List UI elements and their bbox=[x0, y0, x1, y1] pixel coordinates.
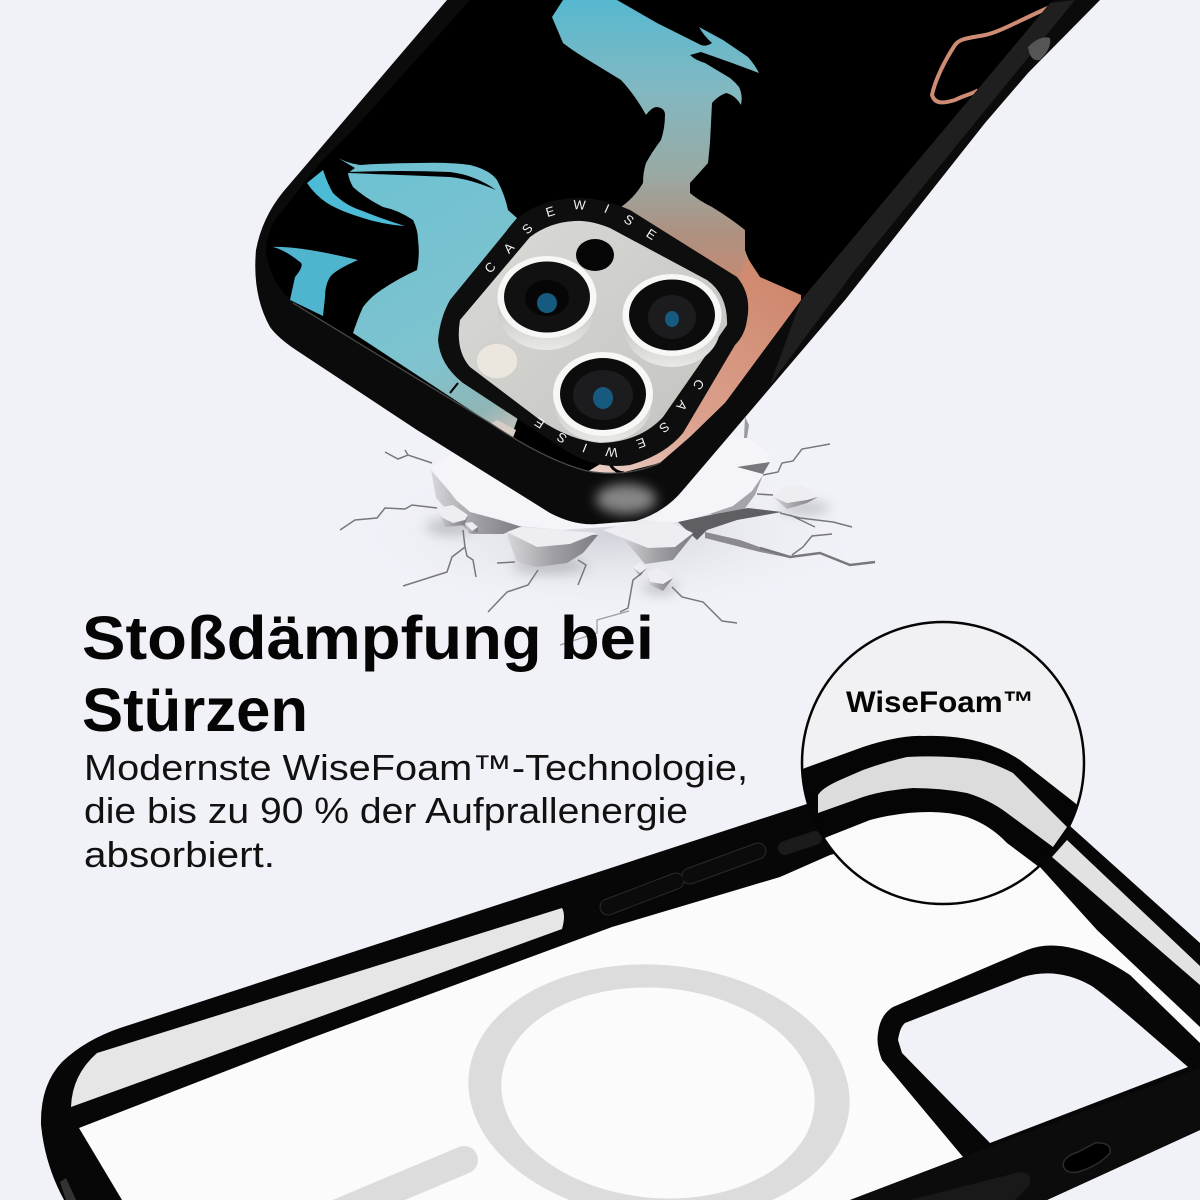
case black frame bbox=[41, 764, 1200, 1200]
cyan lower stripe bbox=[273, 247, 358, 316]
crack lines bbox=[340, 444, 875, 645]
heading: Stoßdämpfung bei bbox=[82, 604, 654, 672]
camera cutout window bbox=[898, 973, 1188, 1143]
camera island bbox=[438, 198, 748, 466]
magnet alignment bar bbox=[340, 1160, 464, 1200]
phone bumper bbox=[255, 0, 1100, 524]
body text: Modernste WiseFoam™-Technologie, bbox=[84, 747, 748, 788]
pale tip near rim bbox=[492, 420, 516, 437]
chunk sides bbox=[437, 497, 818, 591]
soft chunk shadows bbox=[426, 502, 830, 594]
flash bbox=[476, 343, 518, 379]
body text bbox=[84, 747, 748, 875]
WiseFoam magnifier callout bbox=[800, 620, 1086, 906]
rose-gold band by lens island bbox=[587, 257, 801, 474]
case back artwork bbox=[266, 0, 1054, 473]
speaker port bbox=[1063, 1143, 1110, 1172]
camera cutout ring bbox=[878, 946, 1200, 1157]
cyan swirl stripe bbox=[307, 170, 405, 226]
left port bbox=[60, 1178, 76, 1200]
cracked ground impact bbox=[340, 417, 880, 645]
lower frame edge bbox=[850, 1068, 1200, 1200]
chunk tops bbox=[437, 485, 818, 584]
plate right torn edge bbox=[683, 475, 763, 523]
case rim line bbox=[293, 303, 660, 473]
lens one bbox=[498, 256, 596, 350]
dark wedge under right plate bbox=[678, 508, 782, 540]
lens two bbox=[622, 274, 722, 367]
clear back panel bbox=[79, 830, 1200, 1200]
lower side button bbox=[910, 1172, 1030, 1200]
foam strip right bbox=[1052, 840, 1200, 985]
island silver plate bbox=[459, 221, 727, 443]
magnetic ring bbox=[458, 949, 860, 1200]
black curve in rose band bbox=[609, 466, 624, 472]
heading bbox=[82, 604, 654, 744]
top phone in case bbox=[255, 0, 1100, 524]
rose-gold ribbon bbox=[932, 7, 1050, 102]
bottom clear case bbox=[41, 764, 1200, 1200]
body text: absorbiert. bbox=[84, 834, 275, 875]
microphone hole bbox=[576, 239, 614, 271]
heading: Stürzen bbox=[82, 676, 308, 744]
body text: die bis zu 90 % der Aufprallenergie bbox=[84, 790, 688, 831]
magnified clear panel bbox=[825, 812, 1038, 902]
right side bumper sheen bbox=[770, 0, 1075, 385]
island black ring bbox=[438, 198, 748, 466]
teal marble shape left bbox=[338, 158, 518, 429]
magnifier outline bbox=[802, 622, 1084, 904]
foam strip left bbox=[71, 908, 564, 1107]
volume buttons bbox=[608, 838, 815, 907]
black flick bbox=[450, 383, 458, 393]
magnifier label: WiseFoam™ bbox=[846, 686, 1034, 719]
black hairline in teal bbox=[348, 171, 496, 190]
ring brand text bottom: CASEWISE bbox=[534, 380, 704, 458]
lens three bbox=[553, 352, 653, 442]
large raised plate behind the phone bbox=[432, 420, 770, 530]
wedge crack right bbox=[705, 532, 790, 558]
bumper highlight bbox=[596, 484, 656, 514]
side button bbox=[1028, 37, 1050, 60]
ring brand text top: CASEWISE bbox=[486, 200, 657, 272]
magnified corner content bbox=[803, 736, 1076, 866]
magnified outer band bbox=[803, 736, 1076, 866]
plate left torn edge bbox=[431, 470, 522, 534]
magnified foam strip bbox=[818, 756, 1067, 847]
marble bird shape bbox=[552, 0, 800, 339]
